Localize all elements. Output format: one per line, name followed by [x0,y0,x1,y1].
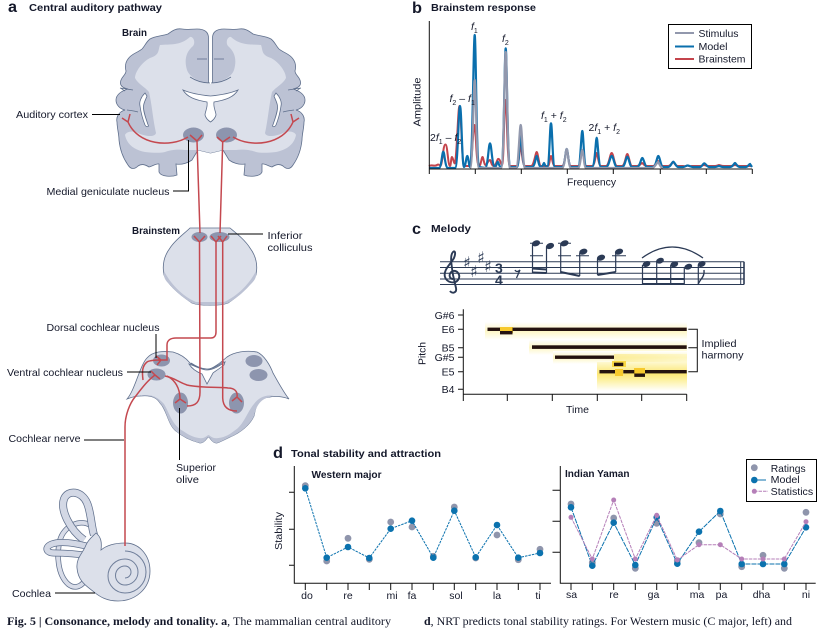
y axis label: Amplitude [412,77,424,126]
peak labels: 1 [439,139,443,146]
medulla and cochlear nuclei illustration [127,351,289,443]
statistics line and points [571,500,806,560]
pitch tick labels: B4 [442,384,455,396]
pitch tick labels: G#6 [435,310,455,322]
peak labels: 2 [457,139,461,146]
note labels [301,590,541,602]
axes [429,21,752,174]
peak labels: + [601,122,613,134]
time axis label: Time [566,404,589,416]
note labels: re [343,590,353,602]
heatmap axes [458,309,687,401]
chart: western major [273,466,551,602]
note labels: pa [716,589,727,601]
heading: central auditory pathway: Central auditory pathway [29,2,162,14]
peak labels: f [613,122,617,134]
panel letter b: b [412,0,422,17]
peak labels: 2 [452,100,456,107]
panel letter d: d [273,445,283,462]
callout: cochlear nerve [8,433,124,445]
legend: tonal stability [746,460,816,502]
figure caption, right column: d, NRT predicts tonal stability ratings. For Western music (C major, left) and [424,614,792,628]
peak labels: f [502,33,505,45]
callout: cochlea [12,588,95,600]
note labels: fa [408,590,417,602]
panel b: brainstem response [412,0,752,188]
note labels: ga [648,589,659,601]
brain illustration [116,29,305,176]
stimulus trace [470,52,663,168]
peak labels: 1 [544,117,548,124]
legend: tonal stability: Model [771,474,800,486]
callout: auditory cortex: Auditory cortex [16,109,89,121]
peak labels: 1 [597,129,601,136]
musical score: 3 [495,260,503,276]
legend: spectrum traces [668,24,752,68]
peak labels: + [548,110,560,122]
note heads [531,239,706,271]
note labels: ni [802,589,810,601]
pitch axis label: Pitch [416,342,428,365]
brainstem illustration [163,228,257,305]
stems and beams [532,244,698,285]
callout: superior olive [176,408,216,486]
peak labels: 2 [505,40,509,47]
pitch tick labels: B5 [442,342,455,354]
note bars [488,328,687,377]
callout: inferior colliculus: Inferior [268,230,303,242]
callout: inferior colliculus: colliculus [268,242,312,254]
slur [642,247,703,258]
musical score: ♯ [477,248,485,267]
peak labels: – [443,132,454,144]
panel c: melody [412,221,744,416]
legend: spectrum traces: Stimulus [698,28,738,40]
legend: spectrum traces: Model [698,41,728,53]
axes [289,466,551,590]
peak labels: 1 [474,28,478,35]
note labels [566,589,810,601]
legend: tonal stability: Ratings [771,463,806,475]
note labels: re [609,589,619,601]
peak labels: 2f [430,132,439,144]
musical score [440,239,744,293]
pitch tick labels: E6 [442,324,455,336]
musical score: 4 [495,272,503,288]
note labels: ma [690,589,704,601]
peak labels: 1 [471,100,475,107]
panel a: central auditory pathway [7,0,312,601]
ascending auditory fibres [122,114,299,546]
callout: dorsal cochlear nucleus: Dorsal cochlear nucleus [46,322,160,334]
label: brainstem: Brainstem [132,225,180,237]
callout: cochlear nerve: Cochlear nerve [8,433,81,445]
rest [515,270,520,278]
subheading: Indian Yaman [565,468,630,480]
peak labels: 2 [616,129,620,136]
musical score: ♯ [470,262,478,281]
heatmap glow [485,322,687,340]
heading: melody: Melody [431,223,471,235]
pitch tick labels [435,310,455,396]
callout: implied harmony: harmony [702,350,744,362]
pitch tick labels: G#5 [435,352,455,364]
callout: implied harmony: Implied [702,338,737,350]
peak labels: f [541,110,544,122]
model line and points [571,507,806,566]
x axis label: Frequency [567,176,617,188]
callout: dorsal cochlear nucleus [46,322,160,358]
callout: implied harmony [688,329,744,372]
panel letter c: c [412,221,421,238]
subheading: Western major [312,469,382,481]
peak labels: f [468,93,471,105]
peak labels: f [560,110,563,122]
cochlea illustration [47,493,150,601]
heading: tonal stability and attraction: Tonal stability and attraction [291,448,441,460]
callout: auditory cortex [16,109,120,121]
y axis label: Stability [273,511,285,550]
chart: indian yaman [552,466,816,601]
label: brain: Brain [122,27,147,39]
peak labels: f [454,132,458,144]
note labels: sa [566,589,577,601]
legend: tonal stability: Statistics [771,486,813,498]
peak labels: f [471,21,474,33]
callout: superior olive: Superior [176,462,216,474]
peak labels: 2f [588,122,597,134]
figure caption, left column: Fig. 5 | Consonance, melody and tonality. a, The mammalian central auditory [7,614,391,628]
ratings [568,501,809,572]
note labels: la [493,590,501,602]
panel d: tonal stability and attraction [273,445,816,602]
note labels: sol [449,590,463,602]
callout: superior olive: olive [176,474,199,486]
callout: ventral cochlear nucleus: Ventral cochlear nucleus [7,367,123,379]
peak labels: – [456,93,468,105]
peak labels [430,21,620,146]
note labels: do [301,590,313,602]
ledger lines [530,243,626,256]
callout: medial geniculate nucleus [46,140,188,198]
peak labels: 2 [563,117,567,124]
spectrum chart [412,21,752,188]
treble clef [445,251,459,293]
callout: inferior colliculus [228,230,312,254]
note labels: mi [386,590,398,602]
note labels: ti [535,590,541,602]
callout: cochlea: Cochlea [12,588,51,600]
key signature and time signature: ♯ [463,253,471,272]
musical score: ♯ [484,257,492,276]
model trace [429,35,752,168]
pitch-time heatmap [416,309,687,416]
model line and points [305,488,540,558]
callout: medial geniculate nucleus: Medial geniculate nucleus [46,186,170,198]
ratings [302,482,543,564]
note labels: dha [753,589,770,601]
peak labels: f [450,93,452,105]
legend: spectrum traces: Brainstem [698,54,746,66]
brainstem trace [429,100,752,166]
pitch tick labels: E5 [442,366,455,378]
axes [552,466,816,590]
heading: brainstem response: Brainstem response [431,2,536,14]
